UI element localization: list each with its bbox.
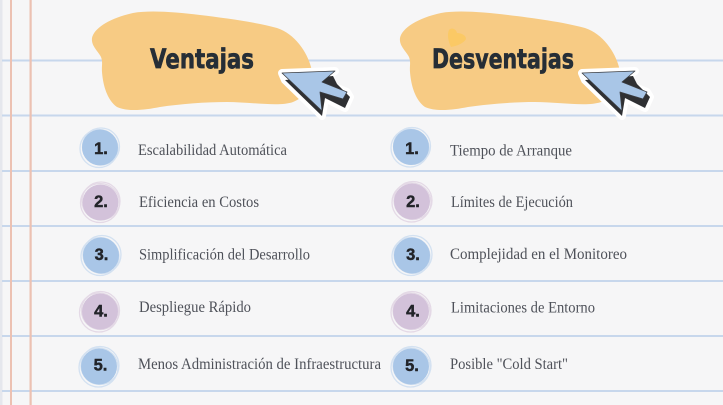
icon: heart [448, 29, 466, 47]
panel: ventajas [79, 12, 381, 387]
list item 1: Tiempo de Arranque [450, 142, 572, 160]
list item 2: Límites de Ejecución [451, 194, 573, 211]
list item 4: 4. [94, 302, 108, 320]
list item 3 [81, 236, 310, 276]
list item 1 [80, 128, 287, 168]
list item 5 [79, 346, 381, 387]
list item 3 [392, 236, 627, 276]
list item 4: Limitaciones de Entorno [451, 300, 595, 316]
list item 5: 5. [94, 356, 107, 374]
list item 4 [391, 292, 595, 332]
list item 5: Posible "Cold Start" [450, 356, 568, 373]
list item 1: 1. [405, 140, 419, 158]
list item 2: 2. [94, 193, 108, 211]
list item 3: Complejidad en el Monitoreo [450, 246, 627, 263]
list item 4: Despliegue Rápido [139, 299, 251, 316]
list item 4: 4. [406, 302, 420, 320]
list item 5: 5. [405, 357, 419, 375]
list item 2 [392, 182, 573, 222]
list item 2: Eficiencia en Costos [139, 194, 259, 211]
list item 3: 3. [95, 246, 108, 264]
list item 3: Simplificación del Desarrollo [139, 246, 310, 264]
list item 3: 3. [406, 246, 420, 264]
heading: Ventajas: Ventajas [150, 44, 254, 75]
heading blob: ventajas [92, 12, 312, 110]
list item 1: 1. [94, 140, 108, 158]
list item 5 [391, 346, 568, 387]
heading: Desventajas: Desventajas [432, 44, 574, 75]
list item 4 [80, 292, 251, 332]
list item 2: 2. [406, 193, 420, 211]
heading blob: desventajas [400, 12, 620, 110]
list item 1: Escalabilidad Automática [138, 142, 287, 159]
list item 2 [80, 182, 259, 222]
list item 5: Menos Administración de Infraestructura [138, 356, 381, 373]
list item 1 [391, 128, 572, 167]
panel: desventajas [391, 12, 650, 387]
icon: cursor arrow [582, 71, 650, 116]
icon: cursor arrow [282, 71, 350, 116]
